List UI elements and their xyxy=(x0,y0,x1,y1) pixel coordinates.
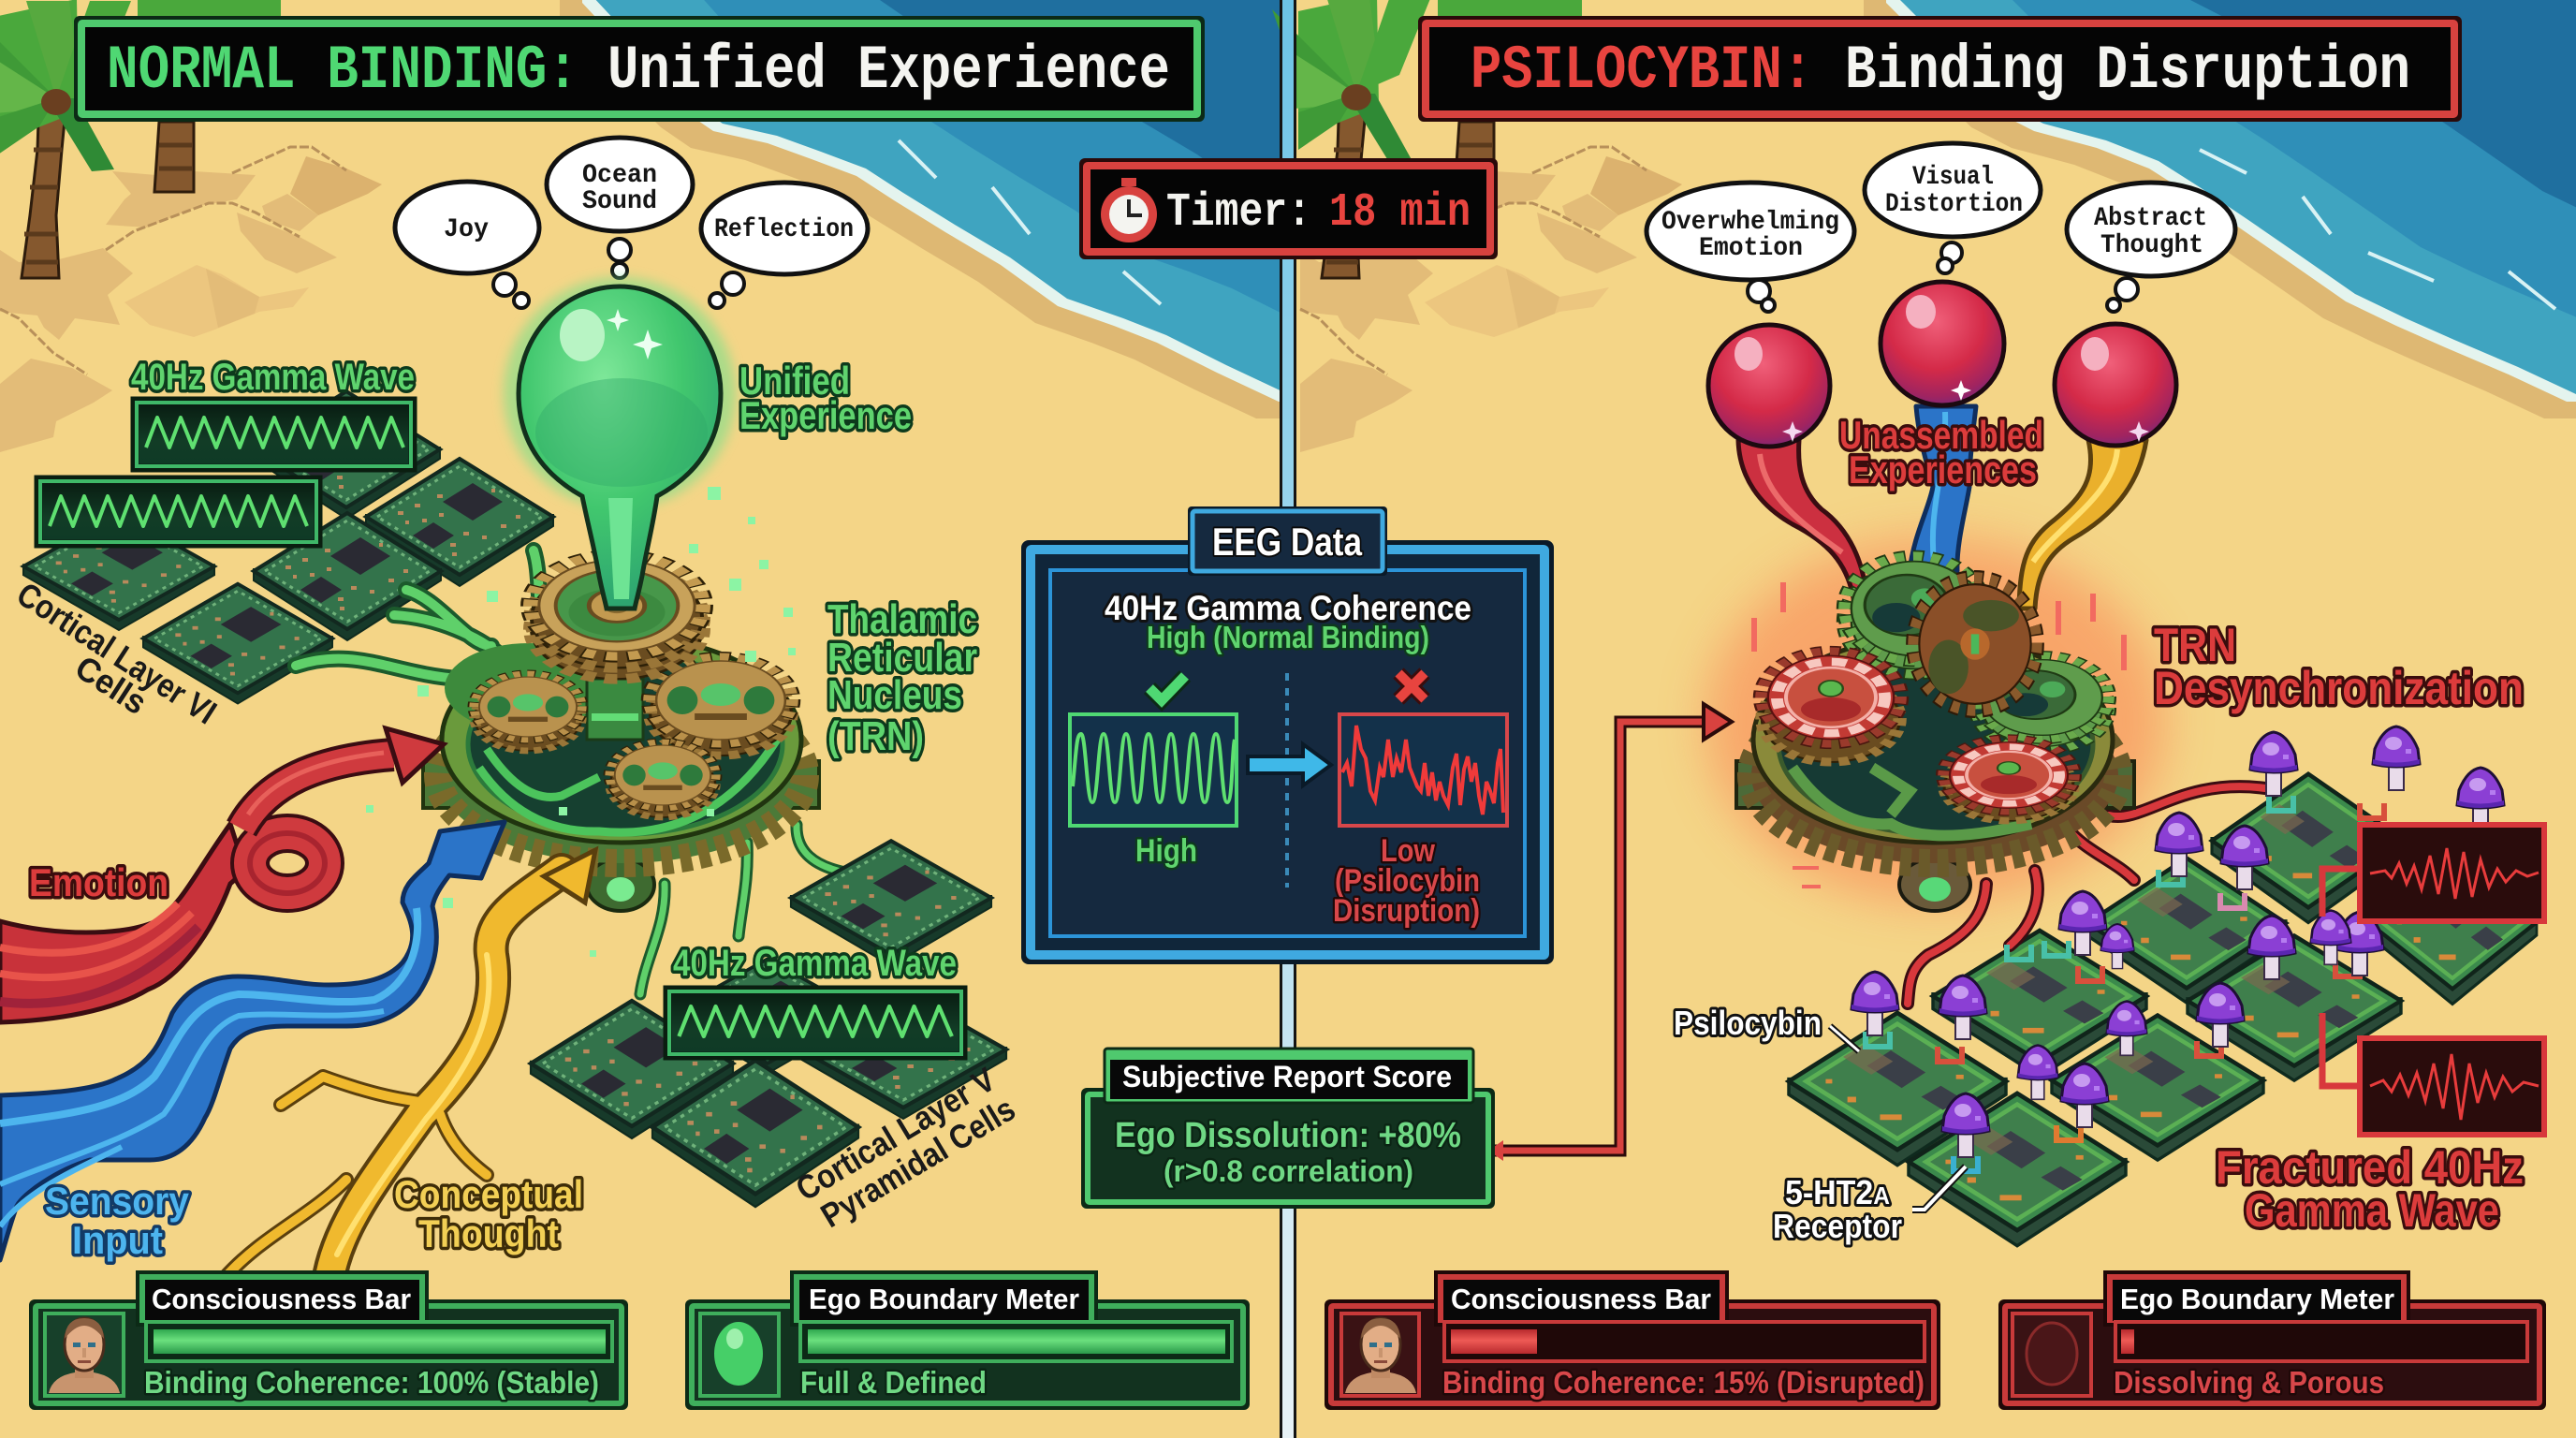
bubble: visual distortion xyxy=(1865,143,2041,273)
bubble: abstract thought: Abstract xyxy=(2094,204,2207,233)
tab xyxy=(2105,1272,2408,1325)
tab: Consciousness Bar xyxy=(152,1283,411,1315)
gear: green rear xyxy=(1845,557,1983,673)
bubble: overwhelming emotion: Emotion xyxy=(1699,234,1803,263)
label: unified experience: Unified xyxy=(739,359,850,403)
connectors: fractured waves xyxy=(2322,869,2360,1086)
label: low psilocybin disruption: Disruption) xyxy=(1333,893,1480,929)
icon: cross xyxy=(1398,673,1425,699)
title: psilocybin: Binding Disruption xyxy=(1845,36,2410,106)
panel: ego boundary psilocybin xyxy=(1998,1272,2546,1410)
tab: Subjective Report Score xyxy=(1122,1060,1452,1093)
gears xyxy=(1762,557,2108,821)
label: unassembled experiences: Unassembled xyxy=(1839,413,2043,457)
panel: ego boundary normal: Full & Defined xyxy=(800,1365,987,1400)
dashed separator xyxy=(1285,673,1289,888)
gear: lower xyxy=(610,742,715,817)
label: 5-HT2A receptor with leader xyxy=(1773,1167,1966,1245)
red connector arrow xyxy=(1488,704,1732,1161)
title: normal binding: Unified Experience xyxy=(607,36,1170,106)
tab: Ego Boundary Meter xyxy=(809,1283,1079,1315)
subheading: High (Normal Binding) xyxy=(1147,620,1429,654)
icon: dissolving ego xyxy=(2012,1313,2091,1396)
arrow: conceptual thought xyxy=(225,850,595,1283)
thalamic machine: psilocybin xyxy=(1736,557,2134,911)
sand dunes: left xyxy=(0,147,382,452)
thalamic machine: normal xyxy=(423,556,819,911)
tab xyxy=(1188,506,1387,576)
bubble: overwhelming emotion: Overwhelming xyxy=(1661,208,1839,237)
bubble: abstract thought xyxy=(2067,183,2235,312)
ribbon: red emotion stream xyxy=(1738,440,1867,604)
ribbon: yellow thought stream xyxy=(2019,440,2146,609)
label: unassembled experiences: Experiences xyxy=(1849,448,2037,492)
label: sensory input: Input xyxy=(72,1218,163,1262)
gears xyxy=(475,556,791,817)
label: cortical layer V pyramidal cells: Pyramidal Cells xyxy=(814,1089,1021,1235)
chips: cortical layer VI xyxy=(23,391,553,704)
panel: subjective report score: Ego Dissolution: +80% xyxy=(1115,1116,1461,1155)
arrow: sensory input xyxy=(0,822,505,1260)
wave box 1 xyxy=(135,401,413,468)
label: thalamic reticular nucleus: Reticular xyxy=(827,635,977,681)
tab: Ego Boundary Meter xyxy=(2120,1283,2394,1315)
label: unified experience: Experience xyxy=(739,393,912,437)
label: TRN desynchronization xyxy=(2154,619,2524,714)
label: cortical layer VI cells: Cortical Layer VI xyxy=(10,575,224,731)
label: 5-HT2A receptor with leader: 5-HT2A xyxy=(1785,1173,1890,1211)
panel: EEG data xyxy=(1021,506,1554,964)
label: conceptual thought xyxy=(394,1172,583,1255)
bubble: ocean sound xyxy=(547,138,693,278)
label: TRN desynchronization: TRN xyxy=(2154,619,2236,671)
label: 40Hz gamma wave bottom: 40Hz Gamma Wave xyxy=(673,943,957,984)
orb: unified experience xyxy=(504,277,736,609)
label: low psilocybin disruption: (Psilocybin xyxy=(1335,863,1480,899)
label: emotion: Emotion xyxy=(29,860,168,904)
timer xyxy=(1079,158,1498,259)
label: cortical layer VI cells: Cells xyxy=(68,648,154,722)
icon: stopwatch xyxy=(1101,178,1157,242)
portrait xyxy=(1341,1313,1419,1396)
neural tubes: machine to chips red xyxy=(1908,786,2265,1004)
base disc xyxy=(423,637,819,911)
bar xyxy=(1444,1322,1925,1361)
label: sensory input: Sensory xyxy=(45,1179,190,1223)
tab xyxy=(1105,1049,1473,1103)
label: thalamic reticular nucleus: Thalamic xyxy=(827,596,977,642)
bubble: joy: Joy xyxy=(444,215,489,244)
panel: ego boundary normal xyxy=(685,1272,1250,1410)
wave box 3 xyxy=(667,990,963,1056)
title: psilocybin: PSILOCYBIN: xyxy=(1471,36,1813,106)
arrow: high to low xyxy=(1248,744,1331,785)
gear: green right xyxy=(1977,656,2108,750)
panel: consciousness bar normal xyxy=(29,1272,628,1410)
bar xyxy=(146,1322,612,1361)
tab xyxy=(792,1272,1096,1325)
bubble: reflection: Reflection xyxy=(714,215,854,244)
palm trees: right xyxy=(1272,0,1582,278)
sand dunes: right xyxy=(1300,147,1682,452)
title: normal binding xyxy=(74,16,1205,122)
thought bubbles: normal xyxy=(395,138,868,308)
panel: consciousness bar normal: Binding Coherence: 100% (Stable) xyxy=(144,1365,599,1400)
icon: check fill xyxy=(1149,676,1185,700)
tab xyxy=(138,1272,427,1325)
icon: ego orb xyxy=(700,1313,779,1396)
mushrooms: psilocybin molecules xyxy=(1852,726,2504,1157)
gear: top xyxy=(532,556,702,679)
chips: psilocybin grid xyxy=(1789,774,2537,1246)
bubble: visual distortion: Visual xyxy=(1912,163,1994,192)
bubble: ocean sound: Sound xyxy=(582,187,657,216)
label: sensory input xyxy=(45,1179,190,1262)
label: thalamic reticular nucleus: Nucleus xyxy=(827,672,962,718)
icon: cross fill xyxy=(1398,673,1425,699)
center divider xyxy=(1280,0,1296,1438)
wave box 2 xyxy=(38,479,318,544)
ribbon: blue sensory stream xyxy=(1910,406,1976,571)
neural tubes: machine to layer V xyxy=(640,825,845,994)
label: fractured gamma wave xyxy=(2216,1141,2524,1237)
label: 40Hz gamma wave top: 40Hz Gamma Wave xyxy=(131,357,415,398)
orb: visual xyxy=(1881,282,2004,405)
red sparks xyxy=(1751,582,2127,888)
bubble: joy xyxy=(395,182,539,308)
green sparkles xyxy=(366,487,796,957)
chips: cortical layer V xyxy=(531,841,1006,1207)
label: conceptual thought: Thought xyxy=(418,1211,559,1255)
panel: consciousness bar psilocybin: Binding Coherence: 15% (Disrupted) xyxy=(1442,1365,1925,1400)
gear: right xyxy=(651,657,791,756)
gear: brown tilted xyxy=(1914,579,2036,710)
ocean: left panel xyxy=(560,0,1280,418)
label: thalamic reticular nucleus: (TRN) xyxy=(827,713,924,759)
thought bubbles: psilocybin xyxy=(1647,143,2235,312)
heading: 40Hz Gamma Coherence xyxy=(1105,589,1471,627)
palm trees: left xyxy=(0,0,281,278)
orb: emotion xyxy=(1708,325,1830,447)
bubble: reflection xyxy=(701,183,868,308)
label: high: High xyxy=(1135,833,1197,869)
bubble: visual distortion: Distortion xyxy=(1885,190,2023,219)
label: low psilocybin disruption xyxy=(1333,833,1480,929)
tab: Consciousness Bar xyxy=(1451,1283,1711,1315)
panel: subjective report score xyxy=(1081,1049,1495,1209)
arrow: emotion xyxy=(0,728,444,1022)
timer: 18 min xyxy=(1329,186,1471,240)
label: TRN desynchronization: Desynchronization xyxy=(2154,662,2524,714)
tab xyxy=(1436,1272,1727,1325)
wave box: fractured A xyxy=(2360,825,2544,921)
label: thalamic reticular nucleus xyxy=(827,596,977,759)
portrait xyxy=(45,1313,124,1396)
receptors xyxy=(1866,796,2384,1171)
gear: red left xyxy=(1762,652,1900,762)
ocean: right panel xyxy=(1864,0,2576,418)
orb: thought xyxy=(2055,324,2176,446)
label: low psilocybin disruption: Low xyxy=(1381,833,1435,869)
label: psilocybin with leader: Psilocybin xyxy=(1674,1004,1822,1042)
chart: low coherence xyxy=(1339,714,1507,826)
red orbs xyxy=(1708,282,2176,447)
red glow behind machine xyxy=(1706,538,2165,903)
bubble: overwhelming emotion xyxy=(1647,183,1854,312)
panel: consciousness bar psilocybin xyxy=(1325,1272,1940,1410)
title: psilocybin xyxy=(1418,16,2462,122)
chart: high coherence xyxy=(1070,714,1237,826)
wave box: fractured B xyxy=(2360,1038,2544,1135)
bubble: abstract thought: Thought xyxy=(2100,231,2203,260)
base disc xyxy=(1736,637,2134,911)
bar xyxy=(2115,1322,2527,1361)
bubble: ocean sound: Ocean xyxy=(582,161,657,190)
bar xyxy=(800,1322,1232,1361)
label: conceptual thought: Conceptual xyxy=(394,1172,583,1216)
panel: ego boundary psilocybin: Dissolving & Porous xyxy=(2114,1365,2384,1400)
label: unified experience xyxy=(739,359,912,437)
gear: red lower xyxy=(1944,739,2073,821)
label: 5-HT2A receptor with leader: Receptor xyxy=(1773,1207,1902,1245)
icon: check xyxy=(1149,676,1185,700)
label: cortical layer V pyramidal cells: Cortical Layer V xyxy=(789,1060,1002,1209)
timer: Timer: xyxy=(1166,186,1311,240)
panel: subjective report score: (r>0.8 correlation) xyxy=(1164,1154,1413,1188)
label: fractured gamma wave: Gamma Wave xyxy=(2245,1184,2499,1237)
label: unassembled experiences xyxy=(1839,413,2043,492)
gear: left xyxy=(475,674,581,751)
title: normal binding: NORMAL BINDING: xyxy=(107,36,578,106)
label: fractured gamma wave: Fractured 40Hz xyxy=(2216,1141,2524,1194)
tab: EEG Data xyxy=(1212,520,1363,564)
neural tubes: machine to layer VI xyxy=(296,550,552,679)
